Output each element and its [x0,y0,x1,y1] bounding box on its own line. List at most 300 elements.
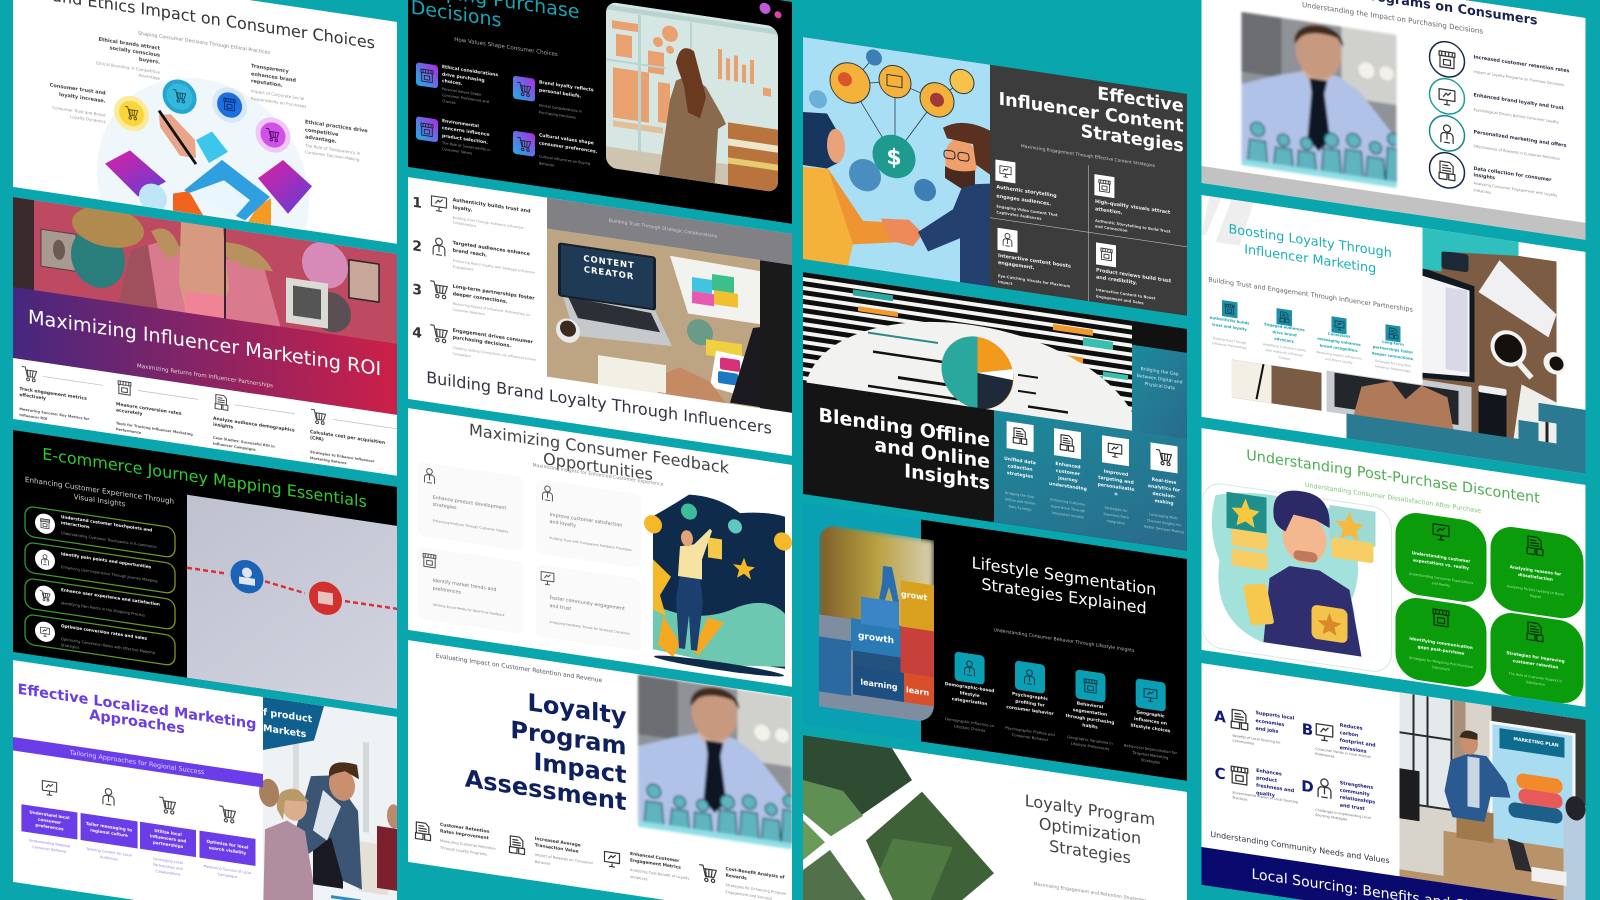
subtitle: Shaping Consumer Decisions Through Ethical Practices [138,31,270,56]
header band: Building Trust Through Strategic Collaborations [609,218,718,240]
text: pillars: and Brand Loyalty [1325,357,1353,365]
text: list: Customer Retention [453,308,485,316]
text: items: High-quality visuals attract [1095,199,1171,216]
subtitle: Visual Insights [74,492,126,509]
text: values list: The Role of Sustainability in [441,141,491,152]
text: segments: Consumer Behavior [1012,733,1049,742]
text: pillars: Strategies for Long-Term [1375,359,1411,368]
text: ethical practices: Ethical practices drive [305,119,368,135]
band: title gradient [13,287,397,415]
text: list: Measuring Impact of Influencer Partnerships on [453,302,530,317]
text: segments: Behavioral [1077,701,1104,710]
text: list: Long-term partnerships foster [453,284,535,302]
text: card copy: Analyzing reasons for [1510,564,1562,577]
text: pillars: Amplifying Customer Loyalty [1263,342,1306,352]
text: segments: Geographic Variations in [1067,735,1113,746]
text: side note: Physical Data [1144,381,1175,392]
badge: product markets: f product [263,707,313,725]
title [1229,222,1392,279]
subtitle: Maximizing Engagement Through Effective Content Strategies [1021,143,1156,169]
text: ethical practices: competitive [305,127,339,138]
text: marketing plan: MARKETING PLAN [1514,736,1559,749]
numbers: 3 [412,282,422,299]
title: Strategies [1081,122,1184,157]
photo: team around table [259,696,401,900]
text: steps: preferences [35,822,64,832]
text: insights: Channel Insights for [1147,518,1182,528]
text: benefits: Increased customer retention rates [1474,54,1569,74]
text: consumer trust: loyalty increase. [59,92,106,105]
text: steps: Leveraging Local [153,857,183,865]
text: insights: Real-time [1152,477,1176,486]
text: items: engagement. [998,260,1035,271]
text: list: Engagement [453,265,474,272]
icons [1007,421,1178,473]
text: items: Engaging Video Content That [996,204,1058,217]
text: metrics: Increased Average [535,836,581,849]
title: Maximizing Influencer Marketing ROI [28,305,381,380]
text: transparency: Responsibility on Purchases [251,96,306,109]
text: benefits: Consumer Trends in Local Product [1315,747,1372,759]
text: metrics: Behavior [535,860,551,866]
title [999,70,1184,157]
text: segments: Geographic [1136,709,1165,720]
text: ethical practices: Consumer Decision-Making [305,149,360,162]
text: pillars: brand recognition. [1320,343,1359,353]
subtitle: Understanding Consumer Behavior Through Lifestyle Insights [994,627,1135,654]
text: steps: Identifying Pain Points in the Shopping Process [61,601,145,618]
panel: effective localized marketing [13,660,401,900]
text: values list: personal beliefs. [539,87,582,100]
band: title [1202,847,1586,900]
text: list: loyalty. [453,205,472,214]
text: values list: Cultural Influences on Buying [539,154,590,166]
panel: loyalty optimization [803,735,1187,900]
text: list: Enhancing Brand Loyalty with Strategic Influencer [453,259,536,275]
text: metrics: Impact of Rewards on Consumer [535,853,594,865]
text: steps: Understand customer touchpoints and [61,514,152,533]
text: segments: Behavioral Segmentation for [1124,744,1178,755]
text: cards: Utilizing Social Media for Real-Time Feedback [433,603,505,617]
text: transparency: Impact of Corporate Social [251,88,304,101]
text: cards: Analyzing Feedback Trends for Strategic Decisions [550,620,630,636]
text: metrics: Measuring Customer Retention [440,839,496,851]
text: side note [1137,365,1183,393]
text: benefits: Enhanced brand loyalty and trust [1474,92,1565,112]
text: values list: Behavior [539,161,555,168]
numbers: 1 [412,195,422,212]
text: list: Engagement drives consumer [453,328,534,346]
text: cards: Enhance product development [433,495,506,512]
decoration: quote mark [1202,195,1254,248]
subtitle: How Values Shape Consumer Choices [454,37,558,58]
badge: product markets: Markets [263,723,307,740]
text: card copy: Understanding Consumer Expectations [1409,572,1473,585]
text: items: engages audiences. [996,193,1051,207]
text: four metrics: Case Studies: Successful ROI in [213,436,275,449]
text: insights: Integration [1107,519,1125,526]
text: benefits: Effectiveness of Rewards in Customer Retention [1474,144,1560,161]
text: metrics: Initiatives [630,875,648,881]
subtitle band [13,737,263,788]
text: values list: Ethical considerations [442,64,498,78]
text: values list: concerns influence [442,125,490,138]
icons: gradient squares [416,61,535,157]
text: values list: Personal Values Shape [442,87,481,97]
subtitle: Enhancing Customer Experience Through [25,475,174,506]
title: Strategies [1049,837,1131,867]
text: items: attention. [1095,206,1123,216]
photo: man with figurines [638,675,795,850]
text: steps: interactions [61,520,90,529]
text: cards: Foster community engagement [550,595,625,612]
text: pillars: Measuring Impact: Influencers [1316,350,1362,361]
title: Insights [904,459,990,495]
text: four metrics: Measure conversion rates [116,401,182,417]
text: four metrics: effectively [19,392,46,402]
photo: growth blocks: learn [906,685,929,698]
text: segments: Demographic Influence on [945,717,995,728]
icons [431,196,447,343]
text: consumer trust: Consumer Trust and Brand [52,105,106,118]
text: benefits [1474,54,1569,206]
text: four metrics: accurately [116,407,143,417]
photo: man with figurines [1242,12,1400,188]
text: benefits: Personalized marketing and offers [1474,129,1567,149]
panel: boosting loyalty [1202,195,1586,474]
subtitle: Evaluating Impact on Customer Retention and Revenue [436,653,603,684]
title [819,403,990,495]
text: steps: Optimize conversion rates and sales [61,623,147,641]
text: card copy: gaps post-purchase [1418,644,1464,656]
text: ethical practices: advantage. [305,134,337,145]
text: cards: preferences [433,586,461,596]
numbers [412,195,422,342]
text: pillars: advocacy. [1274,337,1295,344]
text: steps: Consumer Behavior [32,845,67,854]
photo: growth blocks: growt [901,590,928,602]
photo: content creator desk [547,229,792,413]
title: Program [510,716,627,761]
text: benefits: Data collection for consumer [1474,166,1552,183]
title: Loyalty Program [1025,791,1155,829]
text: steps: Understanding Regional [29,838,70,848]
text: card copy: and Reality [1432,581,1450,588]
panel: title block [803,382,994,522]
title [972,553,1156,619]
text: four metrics: Track engagement metrics [19,386,87,402]
text: benefits: Practices [1233,796,1248,802]
text: values list: drive purchasing [442,72,485,84]
text: insights: Offline and Online [1005,497,1035,506]
text: insights: Enhanced [1055,461,1081,471]
text: segments: habits [1082,722,1098,731]
photo: growth blocks [819,523,934,723]
text: card copy: dissatisfaction [1518,572,1553,582]
text: insights: Bridging the Gap: [1005,491,1035,499]
text: card copy: Identifying communication [1409,636,1473,650]
text: ethical brands: Advantage [138,73,161,81]
text: segments: Psychographic [1012,691,1048,702]
text: list: brand reach. [453,248,487,259]
text: metrics: Analyzing Cost-Benefit of Loyalty [630,868,690,881]
illustration: man rating stars [1202,477,1392,674]
title: Optimization [1039,814,1141,848]
text: insights: customer [1056,468,1081,478]
cards: purple steps [21,804,256,866]
text: metrics [439,822,787,900]
text: card copy: Understanding customer [1412,550,1471,564]
text: ethical brands: buyers. [139,57,160,66]
text: list: purchasing decisions. [453,335,511,349]
text: benefits: Initiatives [1474,188,1491,195]
text: items: Impact [998,280,1013,286]
panel: effective influencer content [803,37,1187,316]
text: segments: Psychographic Profiles and [1005,726,1055,737]
text: cards: Identify market trends and [433,578,496,593]
photo: growth blocks: learning [860,678,898,692]
panel: maximizing influencer marketing ROI [13,193,397,476]
text: values list: Cultural values shape [539,132,594,146]
text: steps [61,514,160,662]
subtitle band: Tailoring Approaches for Regional Success [69,748,205,776]
text: four metrics: Calculate cost per acquisition [310,429,385,446]
text: segments: profiling for [1015,698,1046,709]
letters: D [1301,777,1314,797]
panel: lifestyle segmentation [803,502,1187,781]
text: segments: categorization [952,696,987,707]
text: items: Interactive Content to Boost [1096,288,1156,301]
text: segments: Lifestyle Preferences [1071,742,1109,751]
text: steps: Audiences [100,855,118,862]
panel: local sourcing [1202,663,1586,900]
text: four metrics: Performance [116,427,142,435]
text: content creator: CREATOR [584,265,634,282]
panel: white content card [1202,195,1422,385]
text: steps: partnerships [153,840,184,849]
text: insights: Strategies for [1104,506,1128,513]
title: Blending Offline [819,403,990,452]
text: values list: consumer preferences. [539,140,598,155]
letters: C [1215,764,1226,784]
text: pillars: Authenticity builds [1210,316,1250,326]
text: pillars: Building Trust Through [1213,336,1246,345]
text: benefits: Supports local [1256,710,1295,722]
text: values list: choices. [442,78,463,87]
text: insights: understanding [1049,481,1087,493]
text: insights: Integrated Insights [1052,511,1084,520]
text: segments: lifestyle [960,690,980,699]
icons [1433,522,1543,642]
panel: post-purchase discontent [1202,428,1586,707]
illustration: handshake network: $ [886,143,902,172]
text: list [453,197,536,368]
text: segments: Targeted Marketing [1132,751,1169,760]
text: metrics: Strategies for Enhancing Program [726,883,787,896]
text: card copy: Analyzing Factors Leading to Buyer [1507,584,1565,597]
text: insights: decision- [1152,491,1176,500]
text: card copy: Regret [1530,594,1542,599]
accents: teal blocks [1346,216,1586,474]
text: consumer trust [50,82,106,124]
text: steps: search visibility [209,845,246,856]
text: card copy: expectations vs. reality [1413,557,1469,571]
text: list: Creating Lasting Connections via Influencer-Driven [453,346,536,362]
text: values list: Consumer Values [442,147,472,156]
text: items: Interactive content boosts [998,253,1071,270]
panel: shaping purchase decisions [408,0,792,224]
text: four metrics: Marketing Returns [310,456,347,465]
text: steps: Collaborations [155,869,181,877]
text: content creator: CONTENT [583,254,635,272]
text: transparency [251,63,306,109]
text: content creator [584,255,634,280]
text: benefits: carbon [1340,730,1359,739]
text: metrics: Cost-Benefit Analysis of [726,866,785,881]
text: steps: Enhance user experience and satisfaction [61,587,160,607]
icons: step circles [35,512,55,643]
subtitle: Understanding the Impact on Purchasing Decisions [1302,0,1483,36]
text: pillars: trust and loyalty [1212,323,1247,332]
photo: woman at data wall [606,1,778,208]
icons: outlined circles [1430,39,1464,190]
text: ethical practices: The Role of Transparency in [304,143,361,156]
photo: marketing plan presentation [1400,692,1586,900]
text: values list: Consumer Preferences and [442,93,489,104]
text: pillars: Influencer Partnerships [1212,341,1247,350]
text: consumer trust: Consumer trust and [50,82,106,97]
footer strip [1202,166,1586,240]
text: insights: Better Decision-Making [1144,525,1184,534]
numbers: 4 [412,325,422,342]
text: cards: and loyalty [550,519,576,529]
text: pillars: Engaged audiences [1264,322,1306,332]
text: items: Authentic storytelling [996,184,1057,199]
photo: desk with laptop [1232,213,1566,449]
text: metrics: Transaction Value [535,842,579,855]
text: insights: Improved [1104,469,1128,478]
text: items: Engagement and Sales [1096,294,1144,306]
text: four metrics: Strategies to Enhance Influencer [310,450,375,464]
text: benefits: and jobs [1256,726,1279,735]
text: pillars: Consistent [1328,332,1350,339]
text: benefits: quality [1256,790,1276,799]
text: segments: consumer behavior [1006,704,1055,717]
text: segments: segmentation [1073,707,1107,718]
icons [423,468,554,585]
text: values list: Purchasing Decisions [539,110,576,120]
text: metrics: Engagement Metrics [630,857,681,871]
numbers: 2 [412,238,422,256]
text: insights: n [1114,492,1118,498]
cards: four outlined steps [25,506,175,666]
text: side note: Bridging the Gap [1141,366,1179,378]
title: Building Brand Loyalty Through Influencers [426,368,772,438]
text: pillars: Content [1279,355,1291,361]
title: Loyalty [528,688,627,731]
text: items: and Connection [1095,224,1128,233]
badge: product markets [263,697,324,750]
title [465,679,627,816]
text: steps: Identify pain points and opportunities [61,551,152,570]
photo: plants in diamonds [803,735,994,900]
cards: faint backgrounds [418,461,641,651]
text: benefits: Reduces [1340,722,1363,732]
text: segments: lifestyle choices [1131,723,1171,734]
icons: teal tiles [1222,300,1400,342]
text: items: Captivates Audiences [996,210,1042,221]
text: segments: Lifestyle Choices [954,724,985,733]
icons row [22,366,397,435]
dividers [990,151,1187,316]
title: Maximizing Consumer Feedback [469,420,730,478]
text: segments: Strategies [1141,758,1160,765]
text: card copy: Strategies for Mitigating Post-Purchase [1409,656,1473,669]
text: insights: collection [1007,463,1033,473]
text: benefits: footprint and [1340,737,1376,749]
text: four metrics: (CPA) [310,435,324,443]
text: transparency: reputation. [251,78,283,89]
text: steps: Optimize for local [207,839,249,850]
text: card copy: Strategies for improving [1506,650,1565,664]
text: card copy [1409,549,1565,690]
title: Boosting Loyalty Through [1229,222,1392,261]
photo: growth blocks: growth [858,631,894,646]
letters: B [1302,720,1313,740]
text: benefits: Environmental Impact of Local Sourcing [1233,791,1298,804]
text: items: Authentic Storytelling to Build Trust [1095,219,1171,234]
text: benefits: Strengthens [1340,780,1373,791]
photo: woman in pink [13,193,397,346]
title: Influencer Marketing [1244,242,1376,277]
text: benefits: Preferences [1315,752,1335,759]
title: Influencer Content [999,90,1184,137]
panel: e-commerce journey mapping [13,430,397,709]
text: four metrics: Analyze audience demographics [213,416,295,434]
text: card copy: Satisfaction [1526,680,1545,687]
title: Strategies Explained [981,574,1147,618]
text: benefits: insights [1474,172,1495,181]
icons [995,159,1116,267]
text: insights [1004,453,1184,534]
text: values list [441,64,598,174]
text: cards: strategies [433,502,457,511]
icons [1231,709,1333,799]
text: steps: consumer [38,817,62,825]
text: insights: Unified data [1004,456,1036,466]
panel: teal insights [994,410,1187,551]
text: metrics: Enhanced Customer [630,851,680,864]
text: transparency: Transparency [251,63,289,75]
text: insights: Enhancing Customer [1050,498,1086,507]
text: benefits: Sourcing Strategies [1315,813,1348,822]
text: ethical practices [304,119,368,164]
text: steps [28,810,251,878]
title: Assessment [465,765,627,816]
text: pillars: partnerships foster [1373,345,1413,355]
text: values list: product selection. [442,133,488,146]
text: list: Targeted audiences enhance [453,240,531,258]
text: benefits [1232,707,1376,826]
subtitle: Maximizing Insights for Enhanced Customer Experience [532,462,664,488]
text: cards: Enhancing Products Through Customer Insights [433,519,509,534]
illustration: handshake network [803,37,990,287]
text: insights: making [1154,498,1174,507]
text: insights: Seamless Data [1103,512,1129,520]
text: side note: Between Digital and [1137,373,1183,386]
panel: loyalty program impact [408,640,795,900]
text: items: Eye-Catching Visuals for Maximum [998,274,1070,289]
